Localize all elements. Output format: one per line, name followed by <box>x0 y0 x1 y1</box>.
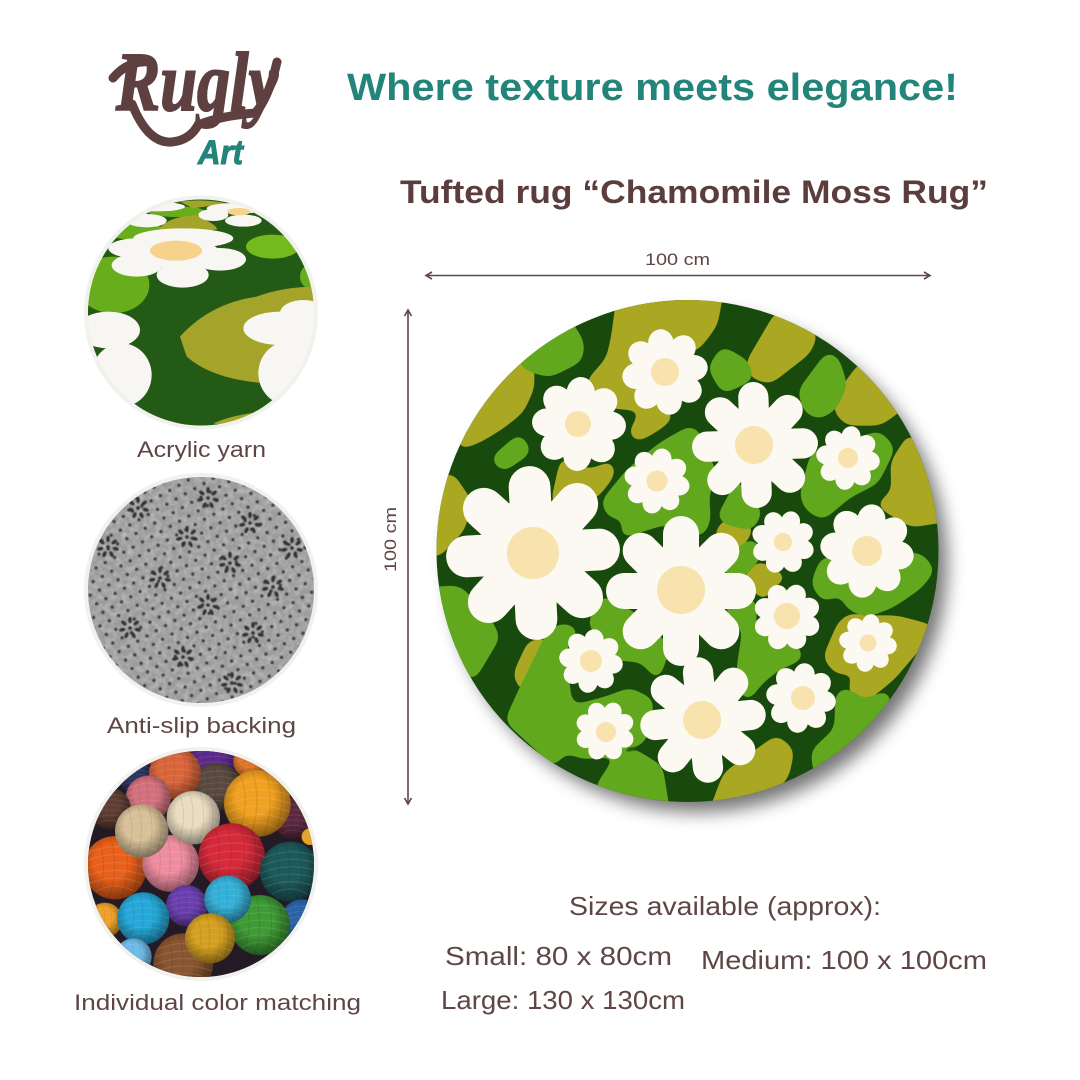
daisy 3 <box>690 380 820 510</box>
caption: anti-slip backing: Anti-slip backing <box>107 713 296 738</box>
logo sub-word: Art <box>197 134 245 172</box>
width dimension arrow <box>426 272 930 279</box>
logo: Rugly Art <box>113 36 279 172</box>
product title: Tufted rug “Chamomile Moss Rug” <box>400 174 988 210</box>
caption: acrylic yarn: Acrylic yarn <box>137 437 266 462</box>
daisy 13 <box>766 663 836 733</box>
rug illustration <box>436 300 938 802</box>
daisy 12 <box>839 614 897 672</box>
logo wordmark: Rugly <box>115 36 279 129</box>
daisy 10 <box>752 511 814 573</box>
daisy 4 <box>640 657 766 783</box>
caption: individual color matching: Individual color matching <box>74 990 361 1015</box>
daisy 15 <box>576 702 634 760</box>
daisy 6 <box>530 375 628 473</box>
daisy 8 <box>624 448 690 514</box>
height label: 100 cm <box>381 507 400 572</box>
daisy 5 <box>820 504 914 598</box>
mid-green patches <box>420 315 935 815</box>
daisy 11 <box>754 584 820 650</box>
white daisies <box>442 323 920 789</box>
daisy 14 <box>559 629 623 693</box>
daisy 9 <box>816 426 880 490</box>
daisy 7 <box>622 329 708 415</box>
daisy 2 <box>606 516 756 666</box>
rug shadow <box>449 314 947 812</box>
olive patches <box>436 300 937 801</box>
panel: yarn balls photo <box>84 747 318 981</box>
tagline heading: Where texture meets elegance! <box>347 67 958 109</box>
panel: acrylic yarn photo <box>84 196 318 430</box>
width label: 100 cm <box>645 250 710 269</box>
daisy 1 <box>442 462 624 644</box>
size: medium: Medium: 100 x 100cm <box>701 945 987 975</box>
panel: anti-slip backing photo <box>84 473 318 707</box>
height dimension arrow <box>404 310 412 804</box>
size: small: Small: 80 x 80cm <box>445 941 672 971</box>
sizes heading: Sizes available (approx): <box>569 891 881 921</box>
logo swash <box>113 62 277 142</box>
size: large: Large: 130 x 130cm <box>441 985 685 1015</box>
daisy centres <box>507 358 882 742</box>
